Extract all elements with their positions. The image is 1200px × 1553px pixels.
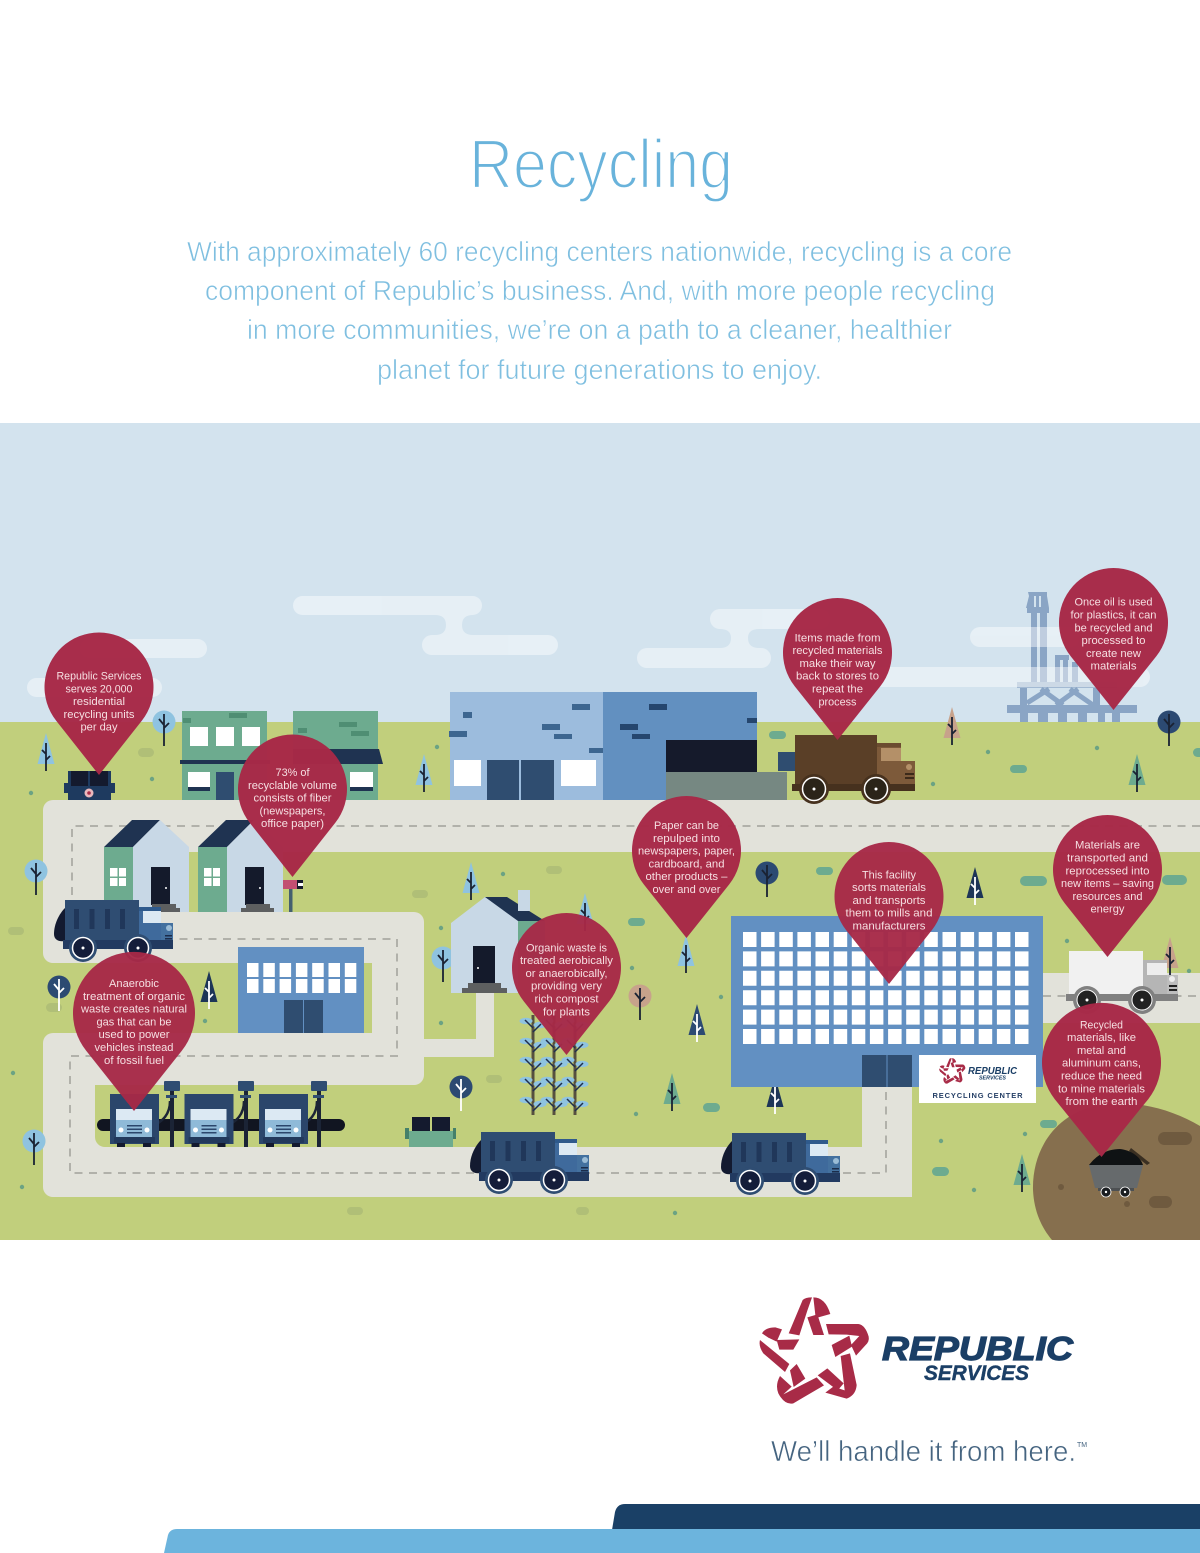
footer band: dark blue xyxy=(612,1504,1200,1530)
centre house xyxy=(451,890,545,993)
logo: Republic Services xyxy=(760,1297,1074,1404)
pin: paper: over and over xyxy=(652,884,721,896)
pin: paper: newspapers, paper, xyxy=(638,846,735,858)
green bin xyxy=(405,1117,456,1147)
pin: natural gas: treatment of organic xyxy=(83,991,186,1003)
pin: facility: This facility xyxy=(862,869,916,881)
pin: natural gas: vehicles instead xyxy=(94,1042,174,1054)
pin: paper: repulped into xyxy=(653,833,720,845)
pin: stores: make their way xyxy=(800,658,876,670)
pin: natural gas: of fossil fuel xyxy=(104,1055,164,1067)
pin: natural gas: gas that can be xyxy=(96,1016,172,1028)
pin: paper: Paper can be xyxy=(654,820,719,832)
pin: stores: back to stores to xyxy=(796,671,879,683)
houses xyxy=(104,820,303,912)
pin: mining xyxy=(1042,1003,1161,1157)
pin: natural gas: used to power xyxy=(98,1029,170,1041)
pin: mining: from the earth xyxy=(1066,1096,1138,1108)
sky xyxy=(0,423,1200,723)
white truck xyxy=(1066,951,1178,1014)
green shops xyxy=(180,711,383,800)
pin: mining: to mine materials xyxy=(1058,1083,1146,1095)
brown delivery truck xyxy=(792,735,915,804)
pin: fiber: consists of fiber xyxy=(254,793,332,805)
pin: compost xyxy=(512,913,621,1055)
pin: recycling units: Republic Services xyxy=(56,670,142,682)
pin: stores: recycled materials xyxy=(792,645,883,657)
pin: compost: providing very xyxy=(531,981,603,993)
pin: mining: materials, like xyxy=(1067,1032,1136,1044)
pin: fiber xyxy=(238,735,347,877)
pin: paper: other products – xyxy=(646,871,728,883)
pin: facility: and transports xyxy=(852,895,926,907)
pin: paper xyxy=(632,796,741,938)
recycling center sign: RECYCLING CENTER xyxy=(932,1091,1023,1100)
pin: stores: Items made from xyxy=(794,632,880,644)
natural gas fueling station xyxy=(103,1081,339,1147)
pin: oil: be recycled and xyxy=(1074,622,1152,634)
pin: oil xyxy=(1059,568,1168,710)
pin: recycling units: serves 20,000 xyxy=(66,683,132,695)
pin: recycling units: per day xyxy=(80,722,118,734)
pin: new items: reprocessed into xyxy=(1066,865,1150,877)
tagline: TM xyxy=(1077,1442,1087,1449)
oil rig xyxy=(1007,592,1137,723)
clouds xyxy=(27,596,1150,697)
pin: compost: rich compost xyxy=(534,994,598,1006)
pin: mining: Recycled xyxy=(1080,1019,1123,1031)
bushes xyxy=(8,748,589,1215)
pin: new items: energy xyxy=(1090,904,1125,916)
blue office building xyxy=(238,947,364,1033)
pin: mining: reduce the need xyxy=(1061,1070,1142,1082)
pin: facility: sorts materials xyxy=(852,882,927,894)
pin: natural gas: waste creates natural xyxy=(80,1004,187,1016)
mining hill xyxy=(1033,1103,1200,1240)
pin: oil: for plastics, it can xyxy=(1070,610,1156,622)
pin: fiber: recyclable volume xyxy=(248,780,337,792)
recycling center sign xyxy=(919,1055,1036,1103)
title: Recycling xyxy=(469,125,733,203)
tagline: We’ll handle it from here. xyxy=(771,1436,1076,1468)
pin: facility xyxy=(834,842,943,984)
intro text block xyxy=(187,236,1012,385)
pin: compost: Organic waste is xyxy=(526,942,607,954)
pin: mining: aluminum cans, xyxy=(1062,1058,1141,1070)
pin: natural gas xyxy=(73,952,195,1111)
logo: Republic Services: SERVICES xyxy=(924,1362,1029,1385)
pin: new items: Materials are xyxy=(1075,840,1140,852)
pin: new items xyxy=(1053,815,1162,957)
pin: stores: process xyxy=(818,696,857,708)
logo: Republic Services: REPUBLIC xyxy=(882,1330,1074,1367)
pin: recycling units xyxy=(44,633,154,775)
pin: recycling units: residential xyxy=(73,696,125,708)
pin: stores xyxy=(783,598,892,740)
trees xyxy=(22,707,1180,1192)
road centre dashes xyxy=(70,826,1200,1173)
pin: oil: materials xyxy=(1090,661,1137,673)
recycling bin xyxy=(64,771,115,800)
pin: compost: treated aerobically xyxy=(520,955,614,967)
mining cart xyxy=(1089,1148,1150,1197)
lower garbage trucks xyxy=(470,1132,840,1195)
pin: natural gas: Anaerobic xyxy=(109,978,159,990)
pin: new items: transported and xyxy=(1067,852,1148,864)
pin: fiber: 73% of xyxy=(276,767,310,779)
pin: facility: manufacturers xyxy=(852,920,926,932)
intro text block: With approximately 60 recycling centers nationwide, recycling is a core xyxy=(187,236,1012,267)
pin: new items: new items – saving xyxy=(1061,878,1154,890)
roads xyxy=(43,800,1200,1197)
ground dots xyxy=(11,745,1191,1215)
pin: oil: processed to xyxy=(1082,635,1146,647)
pin: facility: them to mills and xyxy=(846,908,932,920)
intro text block: component of Republic’s business. And, with more people recycling xyxy=(205,275,995,306)
pin: fiber: (newspapers, xyxy=(260,805,326,817)
pin: stores: repeat the xyxy=(812,684,863,696)
recycling center building xyxy=(731,916,1043,1103)
recycling center sign: SERVICES xyxy=(979,1076,1006,1082)
pin: fiber: office paper) xyxy=(261,818,324,830)
pin: new items: resources and xyxy=(1072,891,1142,903)
panel: recycling landscape scene xyxy=(0,423,1200,1240)
pin: compost: for plants xyxy=(543,1006,591,1018)
intro text block: planet for future generations to enjoy. xyxy=(377,354,822,385)
pin: mining: metal and xyxy=(1077,1045,1126,1057)
ground xyxy=(0,722,1200,1240)
upper garbage truck xyxy=(54,900,173,962)
recycling center sign: REPUBLIC xyxy=(968,1066,1018,1077)
compost plants xyxy=(520,1015,588,1115)
intro text block: in more communities, we’re on a path to a cleaner, healthier xyxy=(247,314,952,345)
pin: recycling units: recycling units xyxy=(64,709,135,721)
footer band: light blue xyxy=(164,1529,1200,1553)
warehouse xyxy=(449,692,796,800)
pin: compost: or anaerobically, xyxy=(526,968,608,980)
pin: oil: create new xyxy=(1086,648,1141,660)
pin: paper: cardboard, and xyxy=(648,858,724,870)
pin: oil: Once oil is used xyxy=(1074,597,1152,609)
